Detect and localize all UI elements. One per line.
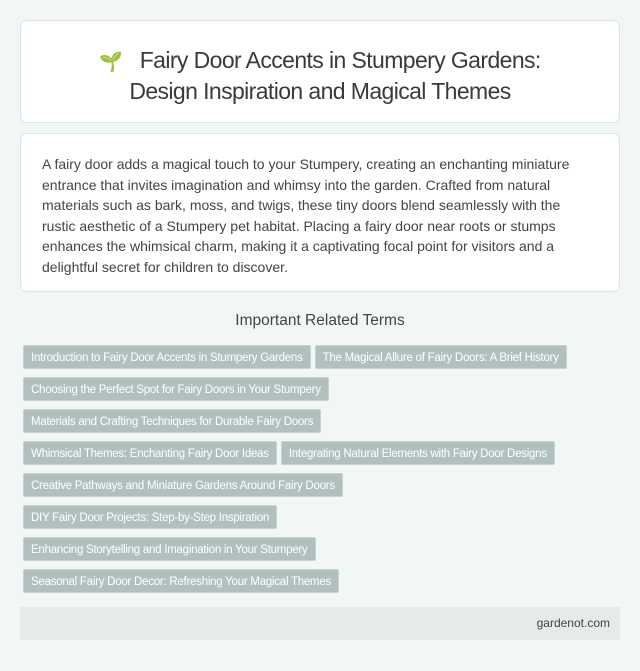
title [99,47,541,104]
tags: Seasonal Fairy Door Decor: Refreshing Your Magical Themes [31,576,331,588]
tags [23,345,567,593]
tags: Materials and Crafting Techniques for Durable Fairy Doors [31,416,313,428]
tags: DIY Fairy Door Projects: Step-by-Step Inspiration [31,512,269,524]
title: 🌱 Fairy Door Accents in Stumpery Gardens: [99,47,541,73]
tags: Integrating Natural Elements with Fairy Door Designs [289,448,547,460]
description card [20,133,620,292]
tags: Enhancing Storytelling and Imagination in Your Stumpery [31,544,308,556]
title: Design Inspiration and Magical Themes [129,78,511,104]
tags: Whimsical Themes: Enchanting Fairy Door Ideas [31,448,269,460]
section heading: Important Related Terms [235,312,405,329]
header card [20,20,620,123]
footer [20,607,620,640]
footer: gardenot.com [537,616,610,630]
description paragraph: A fairy door adds a magical touch to your Stumpery, creating an enchanting miniature entrance that invites imagination and whimsy into the garden. Crafted from natural materials such as bark, moss, and twigs, these tiny doors blend seamlessly with the rustic aesthetic of a Stumpery pet habitat. Placing a fairy door near roots or stumps enhances the whimsical charm, making it a captivating focal point for visitors and a delightful secret for children to discover. [42,156,569,275]
tags: Creative Pathways and Miniature Gardens Around Fairy Doors [31,480,335,492]
tags: Choosing the Perfect Spot for Fairy Doors in Your Stumpery [31,384,321,396]
tags: Introduction to Fairy Door Accents in Stumpery Gardens [31,352,303,364]
tags: The Magical Allure of Fairy Doors: A Brief History [323,352,559,364]
